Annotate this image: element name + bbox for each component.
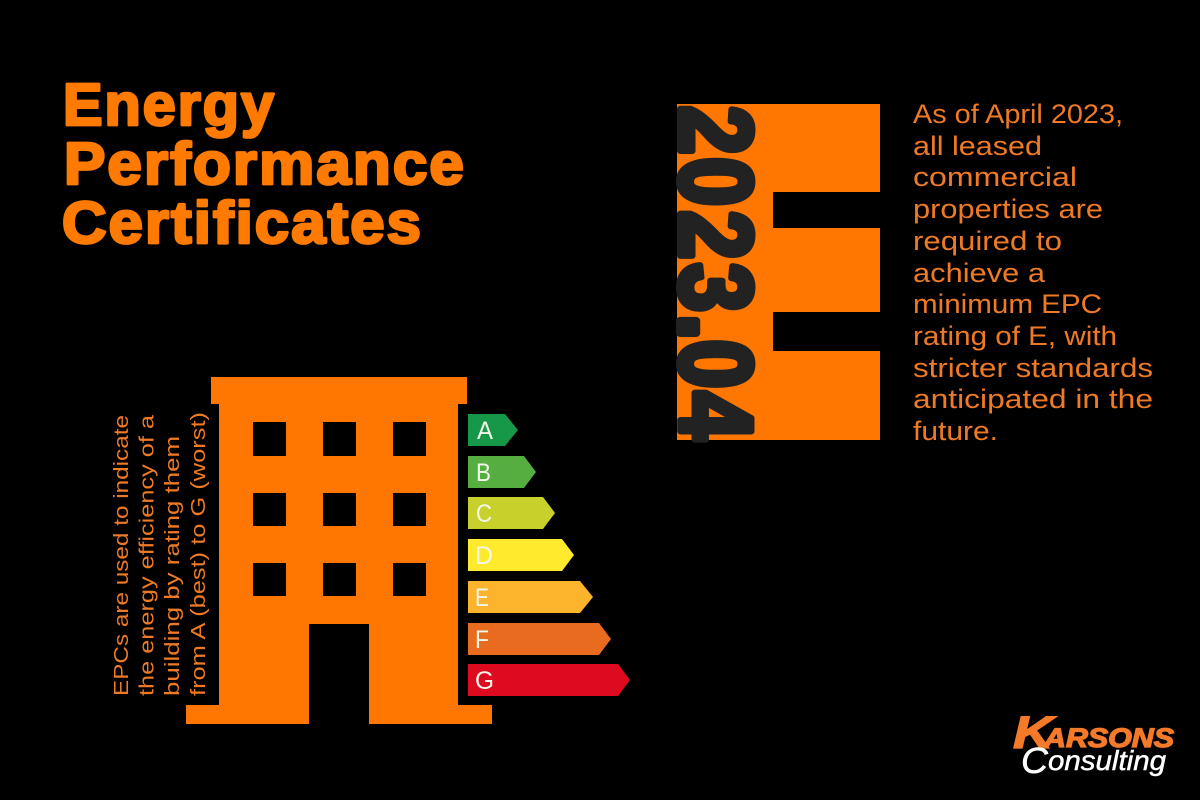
text block: April 2023 requirement: anticipated in the	[913, 384, 1153, 414]
logo: Karsons Consulting: onsulting	[1048, 745, 1166, 776]
text block: EPC explanation rotated: EPCs are used to indicate	[110, 415, 133, 696]
text block: April 2023 requirement	[913, 99, 1153, 446]
rating D: D	[475, 542, 493, 570]
rating G: G	[475, 667, 494, 695]
date: 2023.04 rotated: 202 3 . 04	[658, 106, 772, 440]
text block: EPC explanation rotated: the energy efficiency of a	[136, 414, 158, 696]
text block: April 2023 requirement: commercial	[913, 162, 1077, 192]
icon: building	[186, 377, 492, 724]
logo: Karsons Consulting: ARSONS	[1043, 723, 1174, 753]
rating D	[468, 539, 574, 571]
text block: April 2023 requirement: rating of E, with	[913, 321, 1117, 351]
text block: EPC explanation rotated: building by rating them	[161, 436, 184, 696]
rating A	[468, 414, 518, 446]
text block: April 2023 requirement: required to	[913, 226, 1062, 256]
icon: orange letter E block	[677, 104, 880, 440]
rating C	[468, 497, 555, 529]
text block: April 2023 requirement: stricter standards	[913, 353, 1153, 383]
rating F	[468, 623, 611, 655]
text block: April 2023 requirement: future.	[913, 416, 998, 446]
rating G	[468, 664, 630, 696]
rating F: F	[475, 626, 489, 654]
text block: April 2023 requirement: achieve a	[913, 258, 1045, 288]
title: Certificates	[62, 190, 423, 256]
text block: EPC explanation rotated: from A (best) to G (worst)	[187, 412, 210, 696]
text block: EPC explanation rotated	[110, 412, 210, 696]
rating E	[468, 581, 593, 613]
text block: April 2023 requirement: As of April 2023,	[913, 99, 1123, 129]
chart: EPC rating arrows	[468, 414, 630, 696]
logo: Karsons Consulting	[1013, 707, 1174, 781]
rating E: E	[475, 584, 489, 612]
logo: Karsons Consulting: K	[1013, 707, 1057, 758]
rating B: B	[476, 459, 491, 487]
rating A: A	[477, 417, 493, 445]
rating C: C	[476, 500, 492, 528]
title	[62, 72, 466, 256]
title: Performance	[64, 131, 466, 197]
text block: April 2023 requirement: all leased	[913, 131, 1042, 161]
text block: April 2023 requirement: properties are	[913, 194, 1103, 224]
text block: April 2023 requirement: minimum EPC	[913, 289, 1102, 319]
rating B	[468, 456, 536, 488]
title: Energy	[63, 72, 276, 138]
logo: Karsons Consulting: C	[1021, 740, 1049, 781]
